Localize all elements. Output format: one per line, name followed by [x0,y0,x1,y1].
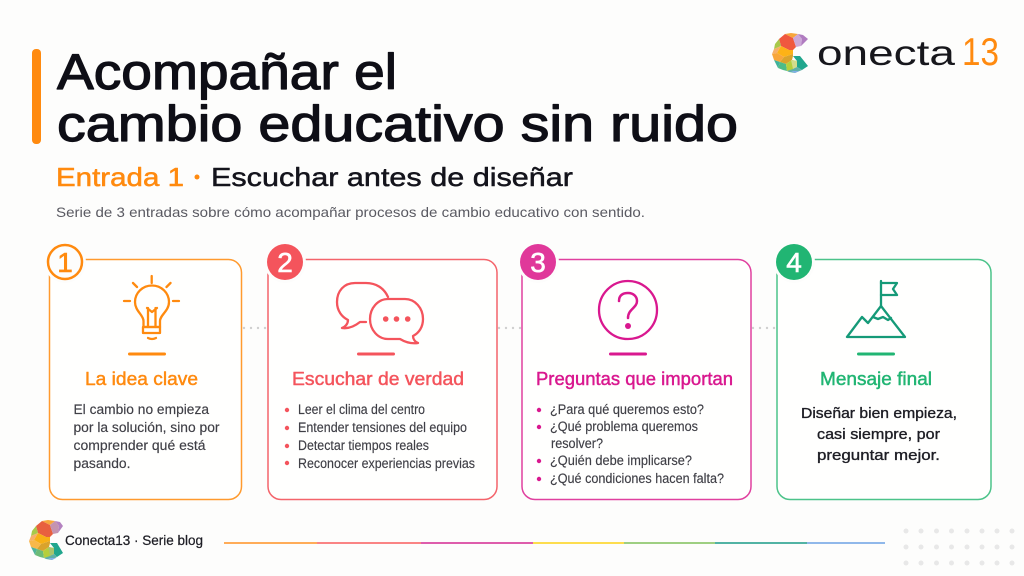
heading: La idea clave [85,369,198,389]
number badge 4 [773,241,815,283]
panel: mensaje final [773,241,991,500]
icon: mountain with flag [847,281,905,337]
heading: Preguntas que importan [536,369,733,389]
number badge 2 [264,241,306,283]
icon: question mark [599,281,657,339]
card outline [522,260,751,500]
number badge 1: 1 [57,247,73,278]
footer colour line [224,542,885,544]
title [57,44,738,152]
bullet list [537,402,724,486]
divider [609,352,647,356]
panel: la idea clave [44,241,242,500]
number badge 4: 4 [786,247,802,278]
body text: por la solución, sino por [74,420,220,435]
bullet list [285,402,475,471]
footer label: Conecta13 · Serie blog [65,532,203,548]
body text: pasando. [74,456,130,471]
body text [74,402,220,471]
bullet list: Leer el clima del centro [298,402,425,417]
bullet list: ¿Para qué queremos esto? [550,402,704,417]
logo number: 13 [962,31,999,74]
number badge 1 [44,241,86,283]
number badge 2: 2 [277,247,293,278]
divider [128,352,166,356]
bullet list: ¿Qué problema queremos [550,419,698,434]
bullet list: Entender tensiones del equipo [298,420,467,435]
subtitle: Entrada 1 [56,162,184,192]
card outline [50,260,242,500]
bullet list: Detectar tiempos reales [298,438,429,453]
bullet list: resolver? [551,436,603,451]
subtitle: Escuchar antes de diseñar [211,162,573,192]
card outline [268,260,497,500]
panel: preguntas que importan [517,241,751,500]
card outline [777,260,991,500]
closing message: preguntar mejor. [817,447,940,464]
number badge 3 [517,241,559,283]
closing message [801,405,957,464]
logo mark [772,33,808,73]
panel: escuchar de verdad [264,241,497,500]
divider [357,352,395,356]
heading: Mensaje final [820,369,932,389]
series description: Serie de 3 entradas sobre cómo acompañar procesos de cambio educativo con sentido. [56,204,645,220]
number badge 3: 3 [530,247,546,278]
icon: light bulb [124,276,179,339]
bullet list: ¿Qué condiciones hacen falta? [550,471,724,486]
logo wordmark: onecta [817,34,956,73]
connector dots [243,327,775,329]
bullet list: Reconocer experiencias previas [298,456,475,471]
closing message: casi siempre, por [817,426,940,443]
logo: Conecta13 [772,31,999,74]
title: Acompañar el [57,44,397,100]
footer logo mark [29,520,63,560]
accent bar [32,49,41,144]
icon dots [383,316,411,322]
body text: El cambio no empieza [74,402,209,417]
heading: Escuchar de verdad [292,369,464,389]
title: cambio educativo sin ruido [57,96,738,152]
bullet list: ¿Quién debe implicarse? [550,453,692,468]
body text: comprender qué está [74,438,206,453]
divider [857,352,895,356]
subtitle [56,162,573,192]
icon: speech bubbles [337,283,423,343]
closing message: Diseñar bien empieza, [801,405,957,422]
